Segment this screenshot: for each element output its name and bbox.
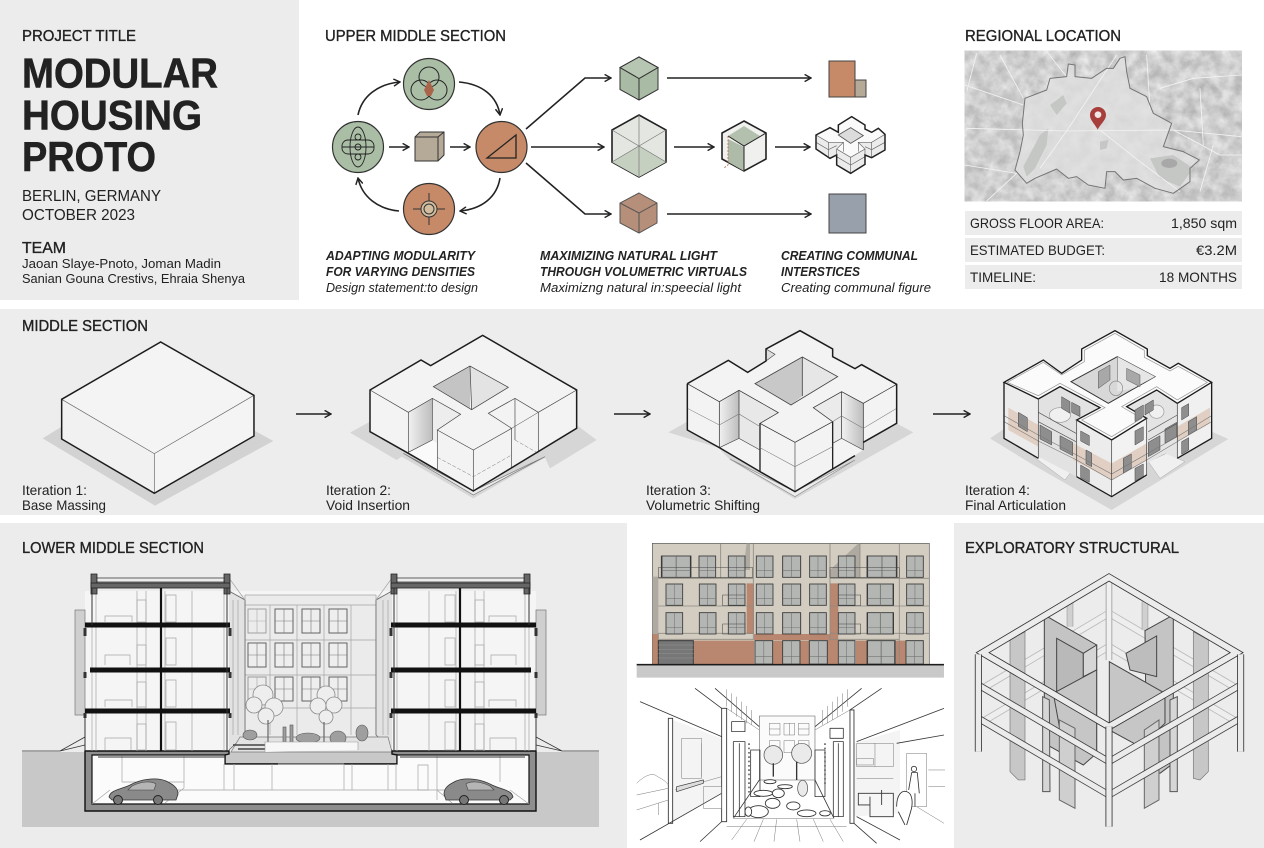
caption: adapting modularity	[325, 248, 478, 295]
caption: creating communal interstices	[781, 248, 931, 295]
data table	[965, 211, 1242, 289]
iteration labels: Volumetric Shifting	[646, 497, 760, 513]
caption: maximizing natural light: MAXIMIZING NATURAL LIGHT	[540, 248, 718, 263]
icon: three overlapping circles	[404, 58, 454, 110]
map: Berlin	[965, 51, 1242, 201]
left wing floors	[75, 574, 245, 751]
structural axonometric	[978, 577, 1241, 827]
panel: middle section	[0, 309, 1264, 515]
iteration labels: Iteration 4:	[965, 482, 1030, 498]
panel: regional location	[965, 28, 1242, 289]
iteration labels: Iteration 1:	[22, 482, 87, 498]
icon: white modular block	[816, 117, 885, 173]
iteration labels	[22, 482, 1066, 513]
courtyard perspective sketch	[637, 688, 945, 843]
iteration 2 void insertion	[350, 335, 597, 498]
iteration labels: Void Insertion	[326, 497, 410, 513]
caption: maximizing natural light: Maximizng natural in:speecial light	[540, 280, 742, 295]
iteration labels: Iteration 2:	[326, 482, 391, 498]
iteration labels: Final Articulation	[965, 497, 1066, 513]
icon: small taupe cube	[415, 132, 444, 161]
caption: creating communal interstices: Creating communal figure	[781, 280, 931, 295]
caption: adapting modularity: ADAPTING MODULARITY	[325, 248, 476, 263]
car left	[109, 779, 178, 804]
data table: 18 MONTHS	[1159, 269, 1237, 285]
caption: adapting modularity: Design statement:to design	[326, 280, 478, 295]
text: team: Sanian Gouna Crestivs, Ehraia Shenya	[22, 271, 246, 286]
panel: exploratory structural	[954, 523, 1264, 848]
text: team	[22, 240, 246, 286]
text: team: TEAM	[22, 240, 66, 257]
arrows: adaptation loop	[358, 82, 500, 211]
car right	[444, 779, 513, 804]
iteration labels: Base Massing	[22, 497, 106, 513]
icon: brown cube	[620, 193, 657, 233]
text: team: Jaoan Slaye-Pnoto, Joman Madin	[22, 256, 221, 271]
iteration 1 massing	[43, 342, 273, 506]
street elevation	[637, 543, 944, 678]
data table: ESTIMATED BUDGET:	[970, 242, 1105, 258]
label: project title: PROJECT TITLE	[22, 28, 136, 45]
text: location and date: BERLIN, GERMANY	[22, 188, 161, 205]
data table: TIMELINE:	[970, 269, 1036, 285]
icon: cut cube	[722, 121, 766, 171]
caption: creating communal interstices: INTERSTICES	[781, 264, 860, 279]
icon: green cube	[620, 57, 658, 100]
text: location and date	[22, 188, 161, 224]
elevation and perspective drawings	[637, 543, 945, 843]
title: modular housing proto: MODULAR	[22, 50, 218, 96]
arrow	[933, 413, 970, 415]
rear posts	[1010, 632, 1208, 780]
courtyard trees and garden	[231, 685, 392, 752]
panel: lower middle section	[0, 523, 627, 848]
heading: regional location: REGIONAL LOCATION	[965, 28, 1121, 45]
right wing floors	[376, 574, 546, 751]
iteration labels: Iteration 3:	[646, 482, 711, 498]
rear courtyard elevation	[229, 591, 392, 750]
panel: project title	[0, 0, 299, 300]
data table: €3.2M	[1196, 242, 1237, 258]
title: modular housing proto: HOUSING	[22, 92, 202, 138]
heading: exploratory structural: EXPLORATORY STRUCTURAL	[965, 540, 1179, 557]
building section drawing	[22, 574, 599, 827]
data table: 1,850 sqm	[1171, 215, 1237, 231]
caption: adapting modularity: FOR VARYING DENSITIES	[326, 264, 475, 279]
panel: upper middle section	[325, 28, 931, 295]
iteration 3 volumetric shifting	[668, 331, 913, 499]
icon: location pin	[1090, 107, 1106, 130]
icon: module cluster circle	[332, 122, 384, 172]
title: modular housing proto: PROTO	[22, 133, 156, 180]
basement parking	[85, 751, 536, 811]
data table: GROSS FLOOR AREA:	[970, 215, 1104, 231]
shear walls	[1043, 615, 1177, 808]
arrows: branches	[526, 78, 811, 214]
icon: terracotta triangle circle	[476, 122, 527, 172]
heading: lower middle section: LOWER MIDDLE SECTION	[22, 540, 204, 557]
icon: terracotta compass circle	[404, 184, 454, 234]
caption: maximizing natural light	[540, 248, 747, 295]
heading: upper middle section: UPPER MIDDLE SECTION	[325, 28, 506, 45]
icon: glass cube	[612, 115, 666, 177]
icon: grey square	[829, 194, 866, 233]
heading: middle section: MIDDLE SECTION	[22, 318, 148, 335]
caption: maximizing natural light: THROUGH VOLUMETRIC VIRTUALS	[540, 264, 747, 279]
arrow	[614, 413, 650, 415]
icon: terracotta and taupe blocks	[829, 61, 866, 97]
caption: creating communal interstices: CREATING COMMUNAL	[781, 248, 918, 263]
title: modular housing proto	[22, 50, 218, 180]
front frame	[978, 577, 1241, 827]
arrow	[296, 413, 331, 415]
rear frame	[983, 578, 1237, 722]
iteration 4 final articulation	[990, 331, 1228, 510]
text: location and date: OCTOBER 2023	[22, 207, 135, 224]
